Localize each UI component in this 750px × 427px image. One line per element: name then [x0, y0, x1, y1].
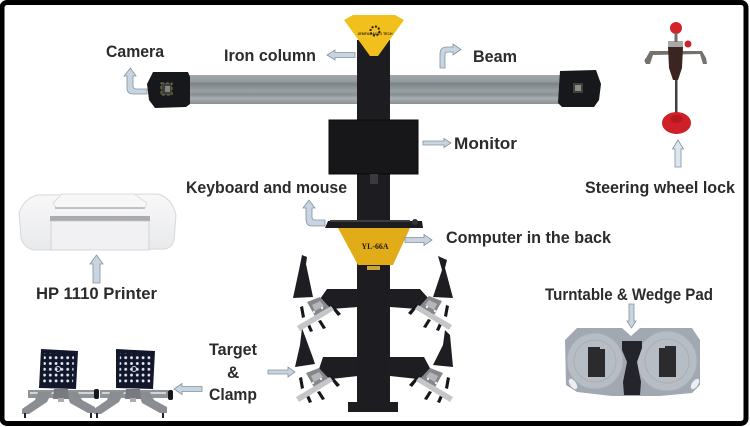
support arms and target boards [293, 255, 453, 379]
label: target and clamp [209, 340, 257, 404]
arrow: iron column [327, 50, 355, 60]
top yellow cap: JEMFUS AUTO TECH [358, 32, 393, 36]
top yellow cap [344, 15, 404, 56]
monitor [329, 120, 418, 184]
clamp knobs [94, 389, 173, 400]
arrow: target and clamp set [174, 384, 202, 394]
label: printer: HP 1110 Printer [36, 284, 157, 303]
label: turntable and wedge pad: Turntable & Wedge Pad [545, 285, 713, 304]
label: monitor: Monitor [454, 134, 517, 153]
turntable and wedge pad [565, 328, 701, 396]
iron column [348, 40, 398, 412]
arrow: beam [440, 44, 461, 68]
target board left [39, 349, 78, 389]
label: target and clamp: Clamp [209, 385, 257, 404]
label: iron column: Iron column [224, 46, 316, 65]
arrow: target to column clamp [268, 367, 295, 377]
arrow: monitor [423, 138, 451, 148]
arrow: turntable [627, 304, 636, 328]
steering wheel lock [644, 22, 707, 134]
label: computer in the back: Computer in the back [446, 228, 612, 247]
clamp right [94, 389, 168, 418]
lower yellow housing [338, 228, 410, 270]
arrow: keyboard and mouse [303, 200, 325, 226]
label: camera: Camera [106, 42, 165, 61]
beam [186, 75, 560, 104]
arrow: camera [124, 68, 147, 94]
label: beam: Beam [473, 47, 517, 66]
arrow: computer [405, 234, 432, 246]
target and clamp set [22, 349, 173, 418]
target board right [116, 349, 155, 389]
printer [19, 194, 176, 250]
right camera [558, 70, 601, 107]
label: target and clamp: & [227, 363, 239, 382]
left camera [147, 72, 190, 108]
arrow: printer [90, 255, 103, 283]
wheel clamps [296, 296, 453, 403]
arrow: steering wheel lock [672, 140, 684, 167]
lower yellow housing: YL-66A [362, 241, 389, 251]
keyboard tray [325, 219, 423, 228]
clamp left [22, 389, 96, 418]
arrows [90, 44, 684, 394]
label: steering wheel lock: Steering wheel lock [585, 178, 736, 197]
label: keyboard and mouse: Keyboard and mouse [186, 178, 347, 197]
label: target and clamp: Target [209, 340, 257, 359]
left camera lens [161, 83, 172, 95]
